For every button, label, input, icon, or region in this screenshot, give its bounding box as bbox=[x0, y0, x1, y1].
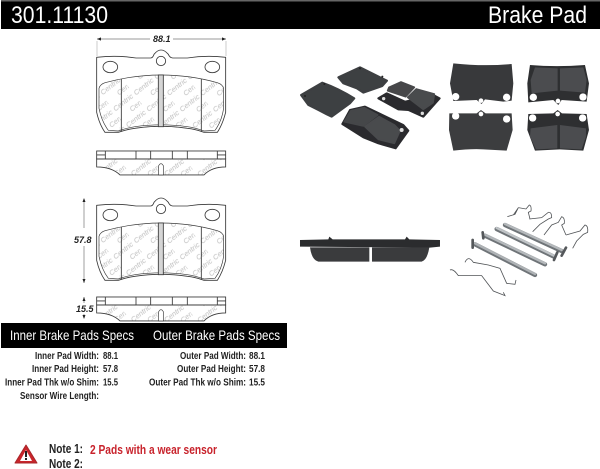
outer pad specs: 15.5 bbox=[249, 376, 265, 388]
outer pad specs bbox=[149, 350, 265, 388]
inner pad specs: Inner Pad Thk w/o Shim: bbox=[5, 376, 99, 388]
product type: Brake Pad bbox=[488, 2, 587, 29]
outer pad specs: 57.8 bbox=[249, 363, 265, 375]
icon: warning triangle bbox=[15, 445, 37, 463]
outer pad side view bbox=[97, 297, 226, 321]
dimension: height 57.8: 57.8 bbox=[74, 235, 92, 245]
outer pad specs: Outer Pad Width: bbox=[180, 350, 246, 362]
dimension: height 57.8 bbox=[74, 198, 92, 283]
photo: front and back pad views bbox=[449, 63, 589, 151]
specs header bar bbox=[1, 323, 287, 348]
dimension: width 88.1: 88.1 bbox=[153, 34, 171, 44]
inner pad specs: 57.8 bbox=[103, 363, 118, 375]
outer specs heading: Outer Brake Pads Specs bbox=[153, 327, 280, 343]
inner pad specs: 15.5 bbox=[103, 376, 118, 388]
header bar bbox=[1, 0, 600, 29]
pins bbox=[473, 224, 566, 275]
outer pad drawing bbox=[97, 198, 226, 280]
inner specs heading: Inner Brake Pads Specs bbox=[10, 327, 134, 343]
notes: 2 Pads with a wear sensor bbox=[90, 442, 217, 457]
inner pad specs: Sensor Wire Length: bbox=[20, 390, 99, 402]
photo: pad edge view bbox=[300, 237, 440, 262]
dimension: thickness 15.5 bbox=[76, 297, 95, 319]
inner pad drawing bbox=[97, 50, 226, 132]
outer pad specs: 88.1 bbox=[249, 350, 265, 362]
inner pad specs bbox=[5, 350, 118, 402]
inner pad specs: Inner Pad Width: bbox=[35, 350, 99, 362]
dimension: thickness 15.5: 15.5 bbox=[76, 304, 95, 314]
photo: four pads angled bbox=[301, 67, 440, 148]
dimension: width 88.1 bbox=[97, 34, 226, 56]
inner pad side view bbox=[97, 151, 226, 175]
photo: hardware kit bbox=[450, 205, 588, 296]
springs bbox=[450, 205, 588, 296]
inner pad specs: 88.1 bbox=[103, 350, 118, 362]
notes: Note 1: bbox=[49, 441, 83, 456]
part number: 301.11130 bbox=[11, 2, 108, 29]
notes bbox=[49, 441, 217, 469]
inner pad specs: Inner Pad Height: bbox=[32, 363, 99, 375]
outer pad specs: Outer Pad Height: bbox=[177, 363, 246, 375]
outer pad specs: Outer Pad Thk w/o Shim: bbox=[149, 376, 246, 388]
